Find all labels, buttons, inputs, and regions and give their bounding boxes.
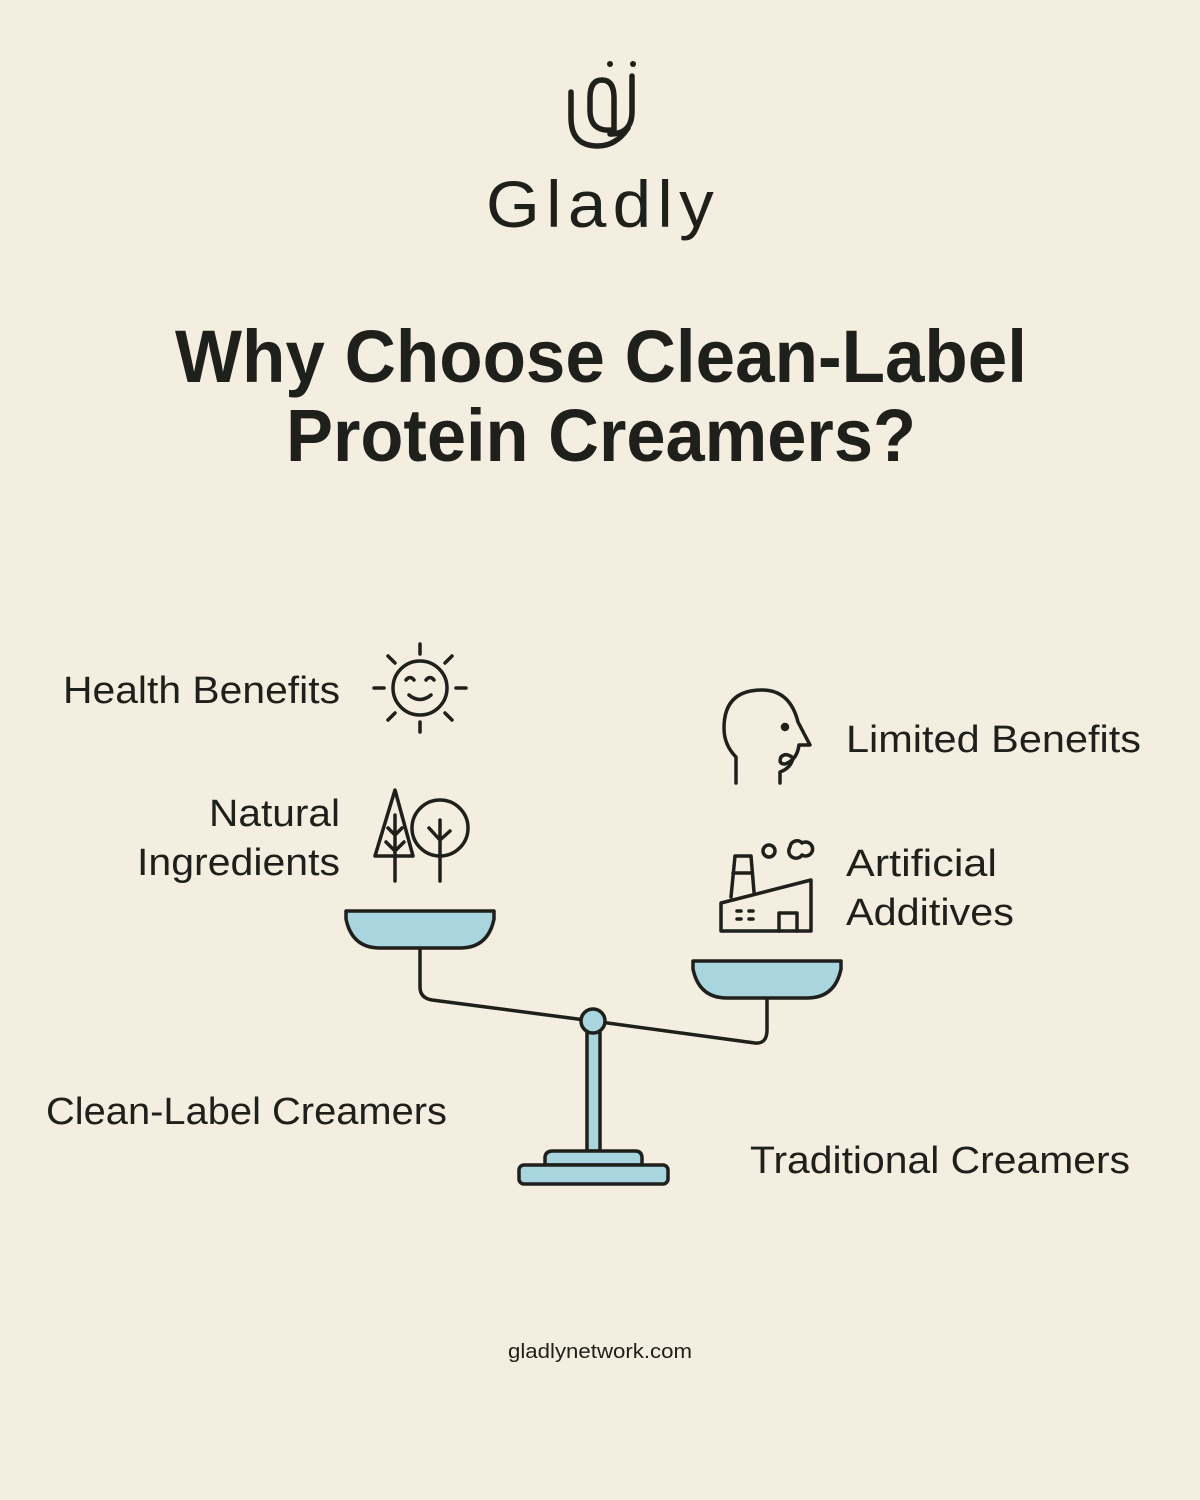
label: natural ingredients: Natural (209, 793, 340, 835)
title (175, 315, 1027, 477)
label: artificial additives: Artificial (846, 843, 997, 885)
label: natural ingredients (137, 793, 340, 884)
logo icon (571, 61, 636, 146)
scale (346, 911, 841, 1184)
label: clean-label creamers: Clean-Label Creamers (46, 1091, 447, 1133)
label: natural ingredients: Ingredients (137, 842, 340, 884)
label: traditional creamers: Traditional Creamers (750, 1140, 1130, 1182)
title: Protein Creamers? (286, 394, 916, 477)
label: artificial additives (846, 843, 1014, 934)
icon: trees (375, 790, 468, 881)
logo wordmark: Gladly (486, 167, 720, 241)
label: health benefits: Health Benefits (63, 670, 340, 712)
label: artificial additives: Additives (846, 892, 1014, 934)
icon: factory (721, 841, 813, 931)
title: Why Choose Clean-Label (175, 315, 1027, 398)
icon: sun (374, 644, 466, 732)
icon: head (724, 690, 810, 783)
label: limited benefits: Limited Benefits (846, 719, 1141, 761)
footer url: gladlynetwork.com (508, 1341, 692, 1363)
